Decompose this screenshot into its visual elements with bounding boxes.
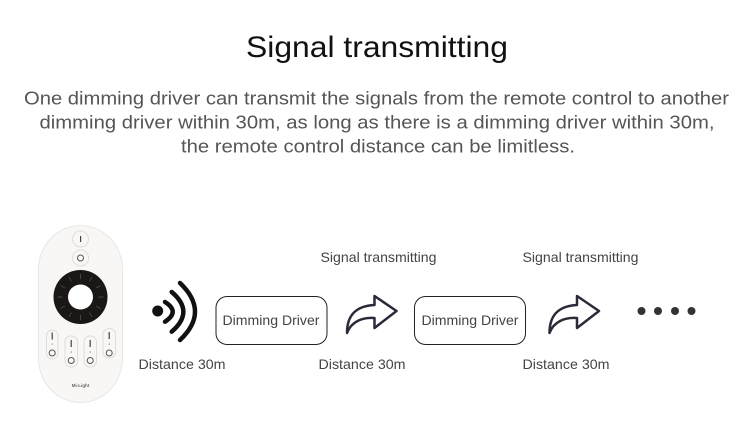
brand label: Mi-Light <box>72 383 90 388</box>
top off button <box>72 250 88 266</box>
labels: distance: Distance 30m <box>522 356 610 372</box>
zone button 4: 4 <box>108 342 110 346</box>
zone button 2 <box>65 336 78 367</box>
labels: signal transmitting: Signal transmitting <box>522 249 638 265</box>
box: dimming driver 2: Dimming Driver <box>422 312 519 328</box>
icon: remote control <box>38 226 122 402</box>
labels: signal transmitting: Signal transmitting <box>320 249 436 265</box>
icon: wireless signal <box>152 283 195 340</box>
zone button 3 <box>84 336 96 367</box>
box: dimming driver 1 <box>216 296 327 344</box>
labels: distance: Distance 30m <box>318 356 406 372</box>
box: dimming driver 2 <box>414 296 526 344</box>
dial <box>54 270 108 324</box>
zone button 2: 2 <box>70 350 72 354</box>
description text: dimming driver within 30m, as long as there is a dimming driver within 30m, <box>40 112 714 132</box>
box: dimming driver 1: Dimming Driver <box>222 312 320 328</box>
arrow 2 <box>550 296 599 333</box>
top on button <box>72 231 88 247</box>
zone button 1 <box>46 330 58 359</box>
labels: distance: Distance 30m <box>138 356 226 372</box>
description text: the remote control distance can be limitless. <box>181 136 575 156</box>
description text <box>24 88 729 156</box>
zone button 1: 1 <box>51 342 53 346</box>
zone button 4 <box>103 328 116 358</box>
remote body <box>38 226 122 402</box>
labels: signal transmitting <box>320 249 638 265</box>
zone button 3: 3 <box>89 350 91 354</box>
description text: One dimming driver can transmit the signals from the remote control to another <box>24 88 729 108</box>
arrow 1 <box>347 296 396 333</box>
continuation dots <box>638 307 696 315</box>
labels: distance <box>138 356 610 372</box>
title: Signal transmitting <box>246 31 508 64</box>
